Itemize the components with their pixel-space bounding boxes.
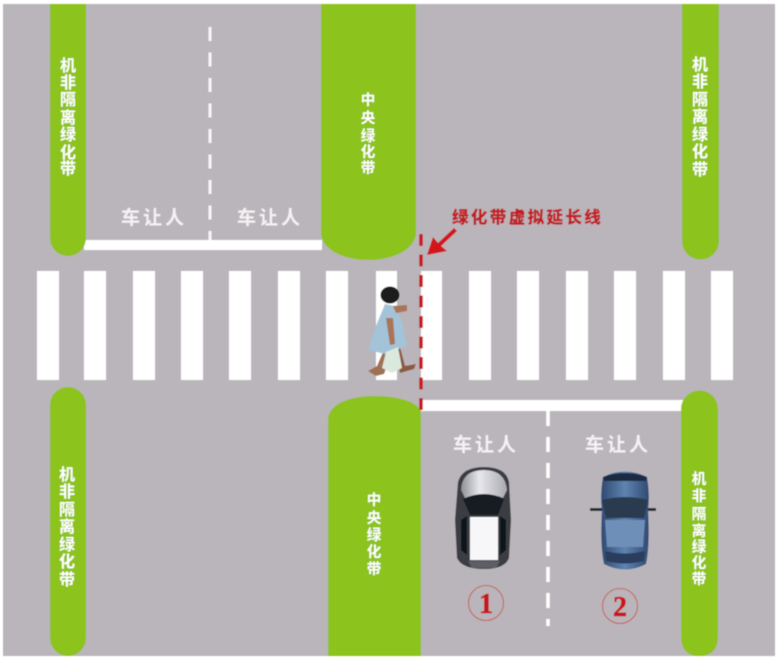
bottom left green belt	[50, 387, 86, 656]
top lane divider	[208, 27, 212, 240]
bottom right green belt: 机	[692, 471, 707, 488]
bottom left green belt: 带	[59, 571, 75, 589]
bottom right green belt: 非	[692, 488, 707, 505]
top right green belt: 化	[692, 142, 708, 161]
top centre green belt: 带	[361, 160, 375, 177]
red arrow	[427, 228, 457, 255]
label: top left lane: 车让人	[121, 206, 187, 229]
bottom centre green belt: 央	[367, 510, 382, 527]
bottom right green belt: 绿	[692, 539, 707, 556]
top right green belt: 离	[692, 107, 708, 126]
top right green belt: 绿	[692, 125, 708, 144]
top right green belt: 非	[692, 73, 708, 91]
bottom right green belt: 带	[692, 571, 706, 588]
label: top right lane: 车让人	[237, 206, 303, 229]
bottom left green belt: 离	[59, 517, 75, 536]
top left green belt: 绿	[60, 125, 76, 144]
car 2 blue sedan	[590, 472, 656, 570]
top left green belt: 隔	[60, 91, 76, 109]
extension line label: 绿化带虚拟延长线	[452, 207, 603, 227]
bottom right green belt: 离	[692, 522, 706, 540]
bottom left green belt: 化	[59, 552, 75, 571]
bottom left green belt: 机	[59, 466, 75, 484]
top right green belt: 机	[692, 56, 708, 74]
bottom right green belt: 化	[692, 554, 707, 572]
bottom left green belt: 非	[59, 483, 75, 501]
dress	[368, 304, 407, 354]
bottom lane divider	[546, 411, 550, 626]
bottom centre green belt: 化	[367, 543, 382, 561]
top right green belt: 隔	[692, 91, 708, 109]
top right green belt	[682, 4, 719, 260]
top centre green belt: 央	[361, 110, 376, 127]
bottom stop line	[421, 400, 683, 411]
top left green belt: 机	[60, 57, 76, 75]
label: bottom lane 1: 车让人	[453, 433, 519, 456]
legs	[368, 352, 392, 376]
bottom right green belt	[681, 390, 718, 656]
bottom centre green belt: 中	[367, 492, 381, 509]
top centre green belt: 化	[361, 143, 376, 161]
bottom left green belt: 隔	[59, 501, 75, 519]
head	[380, 286, 400, 304]
pedestrian	[368, 286, 416, 376]
label: bottom lane 2: 车让人	[585, 433, 651, 456]
car 1 white suv	[455, 467, 511, 569]
badge 1	[468, 586, 504, 620]
top left green belt: 带	[60, 160, 76, 178]
bag	[382, 347, 402, 373]
badge 2: 2	[613, 592, 627, 623]
bottom centre green belt: 绿	[367, 527, 382, 544]
badge 1: 1	[479, 589, 493, 620]
top centre green belt	[321, 4, 416, 260]
top centre green belt: 绿	[361, 128, 376, 145]
bottom centre green belt: 带	[367, 561, 381, 578]
top stop line	[84, 240, 322, 250]
top left green belt: 非	[60, 74, 76, 92]
top centre green belt: 中	[361, 92, 375, 109]
badge 2	[602, 588, 638, 624]
top left green belt	[50, 4, 86, 256]
bottom left green belt: 绿	[59, 535, 75, 554]
red dashed extension line	[419, 234, 423, 410]
top left green belt: 化	[60, 143, 76, 162]
bottom right green belt: 隔	[692, 506, 706, 523]
zebra crossing	[37, 271, 733, 380]
top left green belt: 离	[60, 108, 76, 127]
arm	[393, 305, 407, 313]
bottom centre green belt	[328, 396, 421, 656]
top right green belt: 带	[692, 161, 708, 179]
